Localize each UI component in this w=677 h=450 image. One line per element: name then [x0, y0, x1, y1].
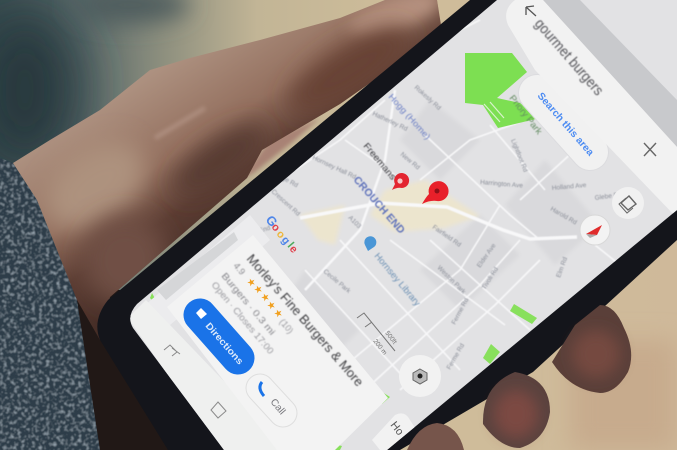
map: street labels: Elm Rd [555, 256, 569, 279]
call button [260, 382, 287, 417]
map: street labels: Hatherley Rd [371, 110, 409, 133]
next result card [372, 413, 415, 450]
map: street labels: Coolbridge Rd [259, 164, 299, 189]
finger three [407, 423, 464, 450]
rating stars: ★ [264, 299, 278, 313]
icon: back arrow [526, 6, 536, 16]
map: place labels [351, 92, 545, 308]
hand: dark palm below the phone [70, 285, 190, 450]
map: street labels: Lightfoot Rd [509, 138, 529, 174]
button: layers [612, 187, 644, 219]
grey band above search bar [543, 0, 677, 147]
map: street labels: Weston Park [436, 264, 467, 296]
rating value: 4.9 [231, 261, 247, 277]
map: place labels: Hornsey Library [372, 251, 423, 308]
map: place labels: Freemans [361, 141, 398, 182]
button: compass [580, 215, 610, 245]
map: search result red pin [422, 181, 449, 204]
map: street labels: Ferme Rd [451, 297, 471, 326]
map: Google logo: e [287, 243, 300, 256]
directions button: Directions [203, 321, 245, 367]
call button: Call [268, 397, 287, 417]
map: scale bar: 200 m [371, 338, 388, 356]
map: Google logo: o [274, 228, 287, 241]
map: street labels: Hornsey Hall Rd [311, 154, 357, 181]
rating stars [247, 278, 282, 318]
map: street labels [236, 84, 623, 371]
map: street labels: Glebe Rd [594, 191, 623, 202]
map: street labels: Cecile Park [322, 268, 352, 295]
map: town centre shading [300, 180, 480, 245]
strip: grey road near card [157, 232, 238, 300]
map: restaurant pin [392, 173, 409, 190]
map: park [465, 53, 540, 128]
review count: (10) [277, 317, 295, 336]
map: scale bar [357, 313, 398, 356]
map: darker city blocks [298, 106, 588, 342]
rating stars: ★ [244, 276, 258, 290]
map: place labels: CROUCH END [351, 174, 407, 237]
map: street labels: Holland Ave [552, 182, 587, 192]
hand: fingers behind phone [240, 118, 320, 180]
icon: close [644, 143, 656, 156]
rating stars: ★ [271, 307, 285, 321]
button: search this area: Search this area [535, 91, 596, 159]
fingers: tips over phone edge [407, 305, 631, 450]
map: street grid [290, 20, 620, 400]
search bar [506, 0, 677, 218]
map: street labels: Rokesly Rd [413, 84, 442, 112]
map: street labels: A103 [347, 214, 363, 230]
map: street labels: Fairfield Rd [431, 224, 462, 249]
map: street labels: Harrington Ave [480, 179, 524, 190]
map: Google logo: o [269, 221, 282, 234]
finger two [483, 372, 550, 448]
category line: Burgers · 0.3 mi [219, 271, 277, 338]
panel: place card [167, 235, 388, 450]
map: Google logo: g [279, 234, 292, 247]
map: scale bar: 500ft [383, 330, 398, 346]
search query: gourmet burgers [531, 16, 606, 99]
map: Google logo: G [263, 212, 281, 230]
map: street labels: Crescent Rd [270, 188, 301, 218]
directions button [196, 308, 245, 367]
map: street labels: Ferme Rd [446, 342, 466, 371]
map: library pin [364, 236, 376, 251]
map: place labels: Hogg (Home) [387, 92, 433, 142]
next result card: Ho [388, 419, 406, 438]
hand: wrist and thumb [13, 0, 446, 340]
card title: Morley's Fine Burgers & More [244, 251, 367, 389]
map: street labels: Tivoli Rd [481, 266, 500, 291]
map: green patches [150, 293, 537, 450]
finger one [552, 305, 631, 393]
rating stars: ★ [251, 283, 265, 297]
nav bar: white strip with buttons [128, 300, 290, 450]
map: street labels: Harold Rd [549, 206, 578, 227]
rating stars: ★ [258, 291, 272, 305]
map: street labels: New Rd [399, 151, 421, 172]
sleeve: blue-grey knit cuff [0, 158, 100, 450]
map: street labels: Elder Ave [476, 242, 498, 269]
button: my location [399, 355, 441, 397]
map: Google logo: l [285, 240, 296, 250]
map: Google logo [266, 216, 296, 252]
strip: map edge between card and phone bezel [130, 215, 270, 325]
hours line: Open · Closes 17:00 [209, 280, 276, 357]
map: place labels: Priory Park [507, 93, 545, 137]
map: street labels: Crouch End [236, 225, 272, 242]
